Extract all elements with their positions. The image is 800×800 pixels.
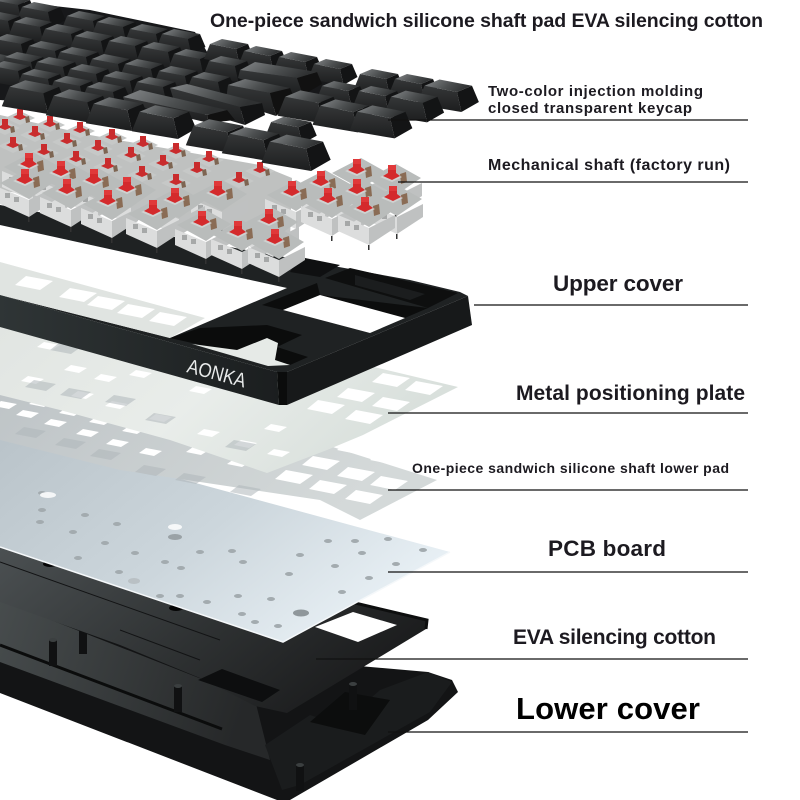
one-piece sandwich silicone shaft lower pad (0, 340, 437, 520)
backspace key (238, 62, 322, 95)
wide keys (123, 79, 295, 125)
label: upper cover: Upper cover (553, 271, 683, 296)
label: metal positioning plate: Metal positioning plate (516, 382, 745, 405)
label: lower cover: Lower cover (516, 691, 700, 726)
label: mechanical shaft: Mechanical shaft (factory run) (488, 157, 730, 174)
lower cover (0, 560, 458, 800)
PCB board (0, 430, 450, 642)
metal positioning plate (0, 265, 458, 473)
label: PCB board: PCB board (548, 536, 666, 561)
EVA silencing cotton (0, 540, 427, 713)
label: keycap: Two-color injection molding (488, 83, 703, 100)
title: One-piece sandwich silicone shaft pad EVA silencing cotton (210, 10, 763, 32)
label: keycap (388, 83, 748, 120)
label: lower pad: One-piece sandwich silicone shaft lower pad (412, 460, 729, 476)
keycaps (0, 0, 479, 171)
label: keycap: closed transparent keycap (488, 100, 692, 117)
logo: AONKA (185, 356, 249, 393)
label: EVA silencing cotton: EVA silencing cotton (513, 626, 716, 649)
upper cover frame (0, 205, 472, 405)
mechanical switches (0, 109, 423, 282)
